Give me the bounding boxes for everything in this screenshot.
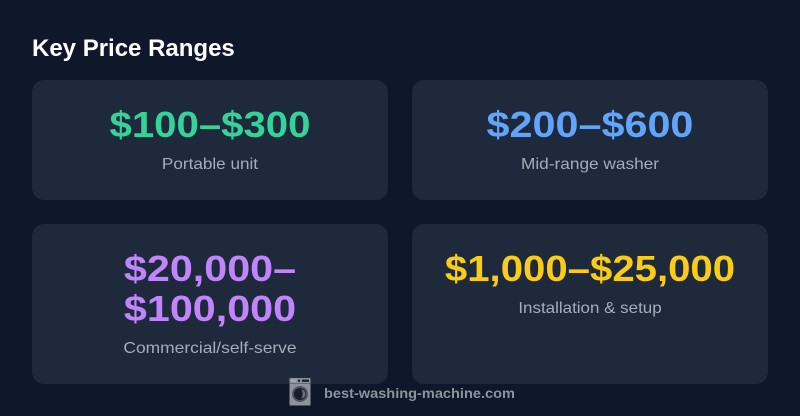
icon: washing machine <box>290 378 310 406</box>
label: mid-range washer: Mid-range washer <box>521 156 659 173</box>
price: commercial/self-serve: $20,000– <box>124 248 296 289</box>
label: installation and setup: Installation & setup <box>518 300 662 317</box>
label: commercial/self-serve: Commercial/self-serve <box>123 340 297 357</box>
panel: commercial/self-serve <box>32 224 388 384</box>
label: portable unit: Portable unit <box>162 156 258 173</box>
price: installation and setup: $1,000–$25,000 <box>445 248 735 289</box>
price: commercial/self-serve <box>124 248 296 329</box>
title: Key Price Ranges <box>32 35 235 62</box>
panel: portable unit <box>32 80 388 200</box>
panel: installation and setup <box>412 224 768 384</box>
price: mid-range washer: $200–$600 <box>487 104 693 145</box>
panel: mid-range washer <box>412 80 768 200</box>
price: commercial/self-serve: $100,000 <box>124 288 296 329</box>
footer: website: best-washing-machine.com <box>324 385 515 401</box>
price: portable unit: $100–$300 <box>110 104 310 145</box>
